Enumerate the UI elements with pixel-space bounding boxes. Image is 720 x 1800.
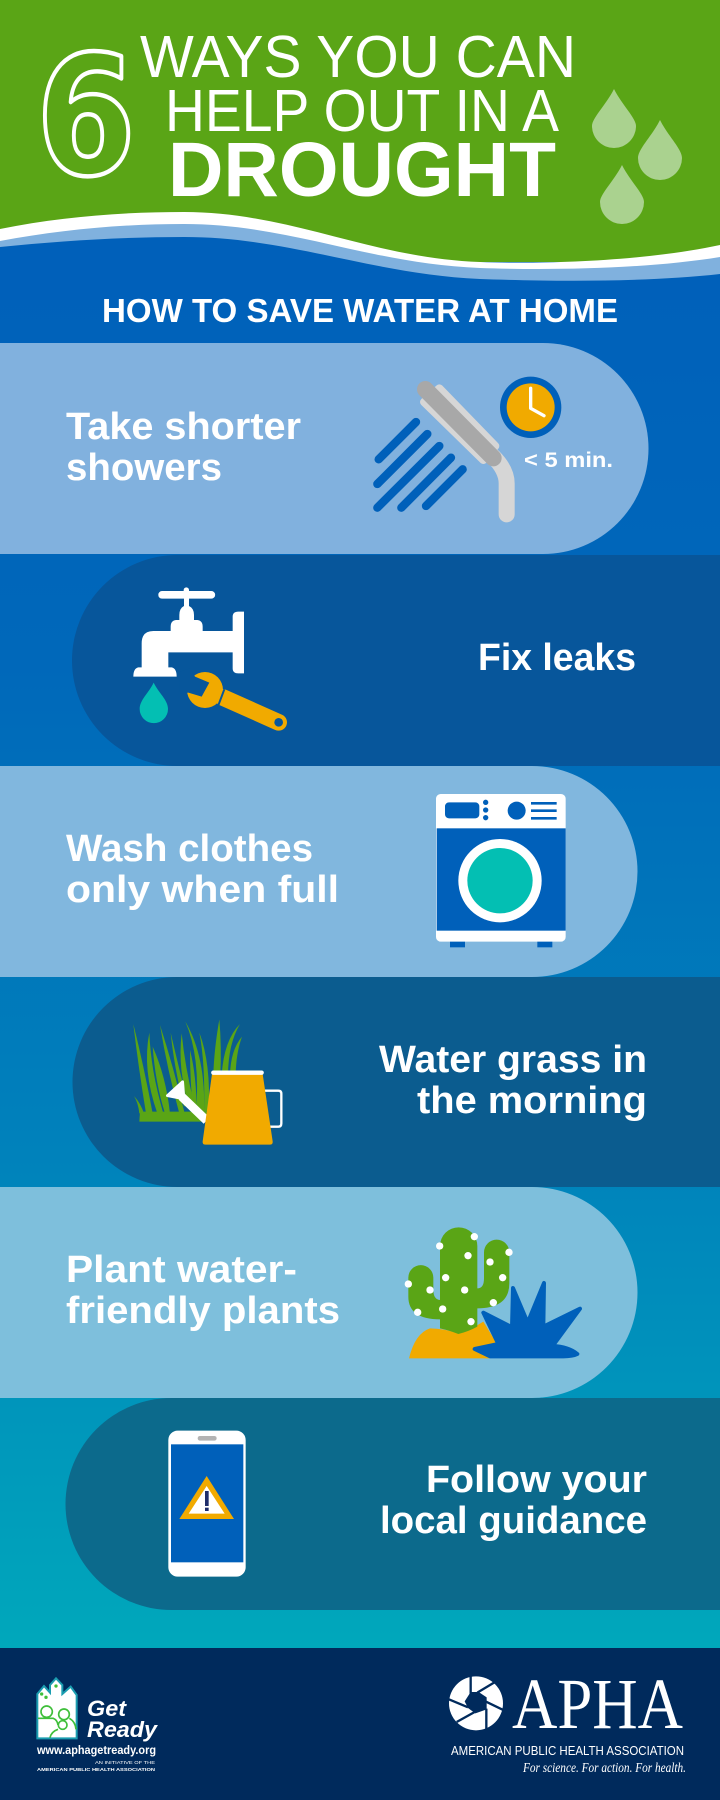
icon: house with family — [37, 1678, 77, 1738]
logo: Get Ready: Ready — [87, 1717, 159, 1742]
text: water grass in the morning: the morning — [417, 1080, 647, 1122]
logo: APHA: APHA — [512, 1664, 683, 1744]
text: wash clothes only when full — [66, 828, 339, 911]
text: fix leaks: Fix leaks — [478, 637, 636, 679]
logo: APHA: For science. For action. For health. — [522, 1760, 686, 1775]
header banner — [0, 0, 720, 300]
logo: APHA — [447, 1664, 686, 1775]
text: under 5 minutes: < 5 min. — [524, 449, 613, 472]
logo: Get Ready — [36, 1678, 159, 1773]
icon: washing machine — [436, 794, 566, 947]
icon: shower head with clock — [377, 377, 561, 514]
logo: Get Ready: AN INITIATIVE OF THE — [95, 1760, 155, 1765]
big outlined number 6: 6 — [36, 21, 136, 214]
text: plant water-friendly plants: friendly plants — [66, 1290, 340, 1332]
title — [140, 24, 576, 213]
panel: water grass — [73, 977, 720, 1187]
text: take shorter showers — [66, 406, 301, 489]
text: wash clothes only when full: only when full — [66, 869, 339, 911]
panel: follow local guidance — [66, 1398, 720, 1610]
text: plant water-friendly plants: Plant water- — [66, 1249, 297, 1291]
text: take shorter showers: Take shorter — [66, 406, 301, 448]
panel: wash clothes — [0, 766, 638, 977]
logo: Get Ready: AMERICAN PUBLIC HEALTH ASSOCIATION — [37, 1767, 156, 1773]
text: follow your local guidance — [380, 1459, 647, 1542]
title: WAYS YOU CAN — [140, 24, 576, 90]
icon: APHA shutter star — [447, 1675, 505, 1731]
text: follow your local guidance: local guidance — [380, 1500, 647, 1542]
icon: grass and watering can — [133, 1019, 281, 1145]
text: follow your local guidance: Follow your — [426, 1459, 647, 1501]
panel: plant water-friendly plants — [0, 1187, 638, 1398]
panel: fix leaks — [72, 555, 720, 766]
logo: Get Ready: Get — [87, 1696, 128, 1721]
title: HELP OUT IN A — [165, 78, 560, 144]
title: DROUGHT — [168, 127, 556, 213]
text: water grass in the morning — [379, 1039, 647, 1122]
blue gradient background — [0, 230, 720, 1650]
logo: Get Ready: www.aphagetready.org — [36, 1745, 156, 1757]
logo: APHA: AMERICAN PUBLIC HEALTH ASSOCIATION — [451, 1743, 684, 1758]
footer — [0, 1648, 720, 1800]
subheading: HOW TO SAVE WATER AT HOME — [102, 292, 618, 329]
text: take shorter showers: showers — [66, 447, 222, 489]
text: wash clothes only when full: Wash clothes — [66, 828, 313, 870]
text: plant water-friendly plants — [66, 1249, 340, 1332]
icon: phone with warning — [168, 1431, 246, 1577]
icon: cactus and agave — [405, 1227, 580, 1358]
text: water grass in the morning: Water grass in — [379, 1039, 647, 1081]
panel: take shorter showers — [0, 343, 649, 554]
icon: leaking tap and wrench — [133, 587, 283, 727]
icon: water drops — [592, 89, 682, 224]
